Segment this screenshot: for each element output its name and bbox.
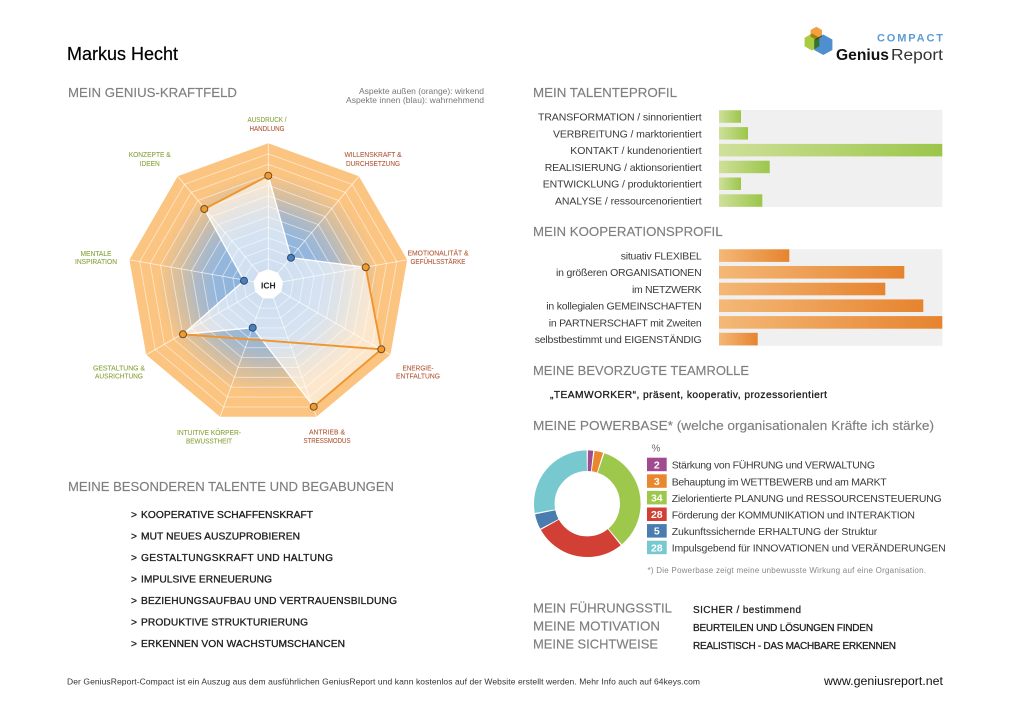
chart: talenteprofil: ANALYSE / ressourcenorientiert <box>555 196 702 208</box>
chart: kooperationsprofil: in kollegialen GEMEINSCHAFTEN <box>546 301 702 313</box>
label: antrieb: ANTRIEB & <box>309 430 345 436</box>
website: www.geniusreport.net <box>823 676 944 688</box>
talent list: PRODUKTIVE STRUKTURIERUNG <box>141 618 308 628</box>
center ICH <box>254 269 283 298</box>
chart: kooperationsprofil: situativ FLEXIBEL <box>621 250 702 262</box>
powerbase legend: % <box>652 444 660 454</box>
talent list: MUT NEUES AUSZUPROBIEREN <box>141 532 300 542</box>
legend row 1: 2 <box>654 459 660 471</box>
team role text: „TEAMWORKER“, präsent, kooperativ, prozessorientiert <box>550 390 827 401</box>
talent list: > <box>131 574 137 586</box>
heading: talente: MEINE BESONDEREN TALENTE UND BEGABUNGEN <box>68 480 394 494</box>
fuehrungsstil row: MEIN FÜHRUNGSSTIL <box>533 602 672 616</box>
label: konzepte: IDEEN <box>140 161 160 168</box>
chart: talenteprofil: REALISIERUNG / aktionsorientiert <box>545 162 702 174</box>
sichtweise row: REALISTISCH - DAS MACHBARE ERKENNEN <box>693 641 896 652</box>
label: willenskraft: DURCHSETZUNG <box>346 161 400 168</box>
motivation row: BEURTEILEN UND LÖSUNGEN FINDEN <box>693 622 873 634</box>
radar background <box>129 143 407 417</box>
label: willenskraft: WILLENSKRAFT & <box>344 152 402 159</box>
heading: teamrolle: MEINE BEVORZUGTE TEAMROLLE <box>533 364 749 378</box>
radar legend note <box>346 86 484 105</box>
powerbase footnote: *) Die Powerbase zeigt meine unbewusste Wirkung auf eine Organisation. <box>648 566 926 575</box>
talent list: KOOPERATIVE SCHAFFENSKRAFT <box>141 510 313 521</box>
label: emotionalitaet: GEFÜHLSSTÄRKE <box>410 258 466 266</box>
label: ausdruck <box>248 117 287 133</box>
chart: kooperationsprofil <box>535 249 942 346</box>
logo text: report: Report <box>891 47 944 64</box>
label: ausdruck: AUSDRUCK / <box>248 117 287 124</box>
label: ausdruck: HANDLUNG <box>250 126 284 133</box>
chart: kooperationsprofil: selbstbestimmt und EIGENSTÄNDIG <box>535 334 702 346</box>
logo text: compact: COMPACT <box>877 32 943 44</box>
label: konzepte: KONZEPTE & <box>129 152 171 159</box>
talent list: ERKENNEN VON WACHSTUMSCHANCEN <box>141 639 345 650</box>
legend row 1: Stärkung von FÜHRUNG und VERWALTUNG <box>672 460 875 472</box>
label: energie: ENTFALTUNG <box>396 374 440 380</box>
logo <box>805 27 944 64</box>
label: emotionalitaet <box>408 250 469 266</box>
title: Markus Hecht <box>67 43 178 64</box>
chart: talenteprofil: KONTAKT / kundenorientiert <box>570 145 702 157</box>
legend row 6: Impulsgebend für INNOVATIONEN und VERÄNDERUNGEN <box>672 543 946 555</box>
legend row 5: 5 <box>654 526 660 538</box>
talent list: GESTALTUNGSKRAFT UND HALTUNG <box>141 553 333 564</box>
talent list: > <box>131 532 137 542</box>
chart: kooperationsprofil: im NETZWERK <box>632 284 702 296</box>
center ICH: ICH <box>261 280 276 290</box>
radar labels <box>75 117 469 446</box>
label: energie <box>396 366 440 380</box>
motivation row <box>533 620 873 634</box>
legend row 5: Zukunftssichernde ERHALTUNG der Struktur <box>672 526 878 538</box>
motivation row: MEINE MOTIVATION <box>533 620 660 634</box>
heading: kooperationsprofil: MEIN KOOPERATIONSPROFIL <box>533 225 723 239</box>
talent list: BEZIEHUNGSAUFBAU UND VERTRAUENSBILDUNG <box>141 596 397 607</box>
fuehrungsstil row <box>533 602 801 616</box>
legend row 3: 34 <box>651 492 663 504</box>
label: willenskraft <box>344 152 402 168</box>
legend row 4: 28 <box>651 509 663 521</box>
label: intuitive: BEWUSSTHEIT <box>186 438 233 446</box>
heading: powerbase: MEINE POWERBASE* (welche organisationalen Kräfte ich stärke) <box>533 419 934 433</box>
orange data lines <box>183 176 381 407</box>
chart: kooperationsprofil: in größeren ORGANISATIONEN <box>556 267 702 279</box>
orange markers <box>179 172 385 410</box>
label: emotionalitaet: EMOTIONALITÄT & <box>408 250 469 258</box>
heading: genius-kraftfeld: MEIN GENIUS-KRAFTFELD <box>68 86 237 100</box>
chart: talenteprofil <box>538 110 942 208</box>
talent list: > <box>131 553 137 564</box>
legend row 2: Behauptung im WETTBEWERB und am MARKT <box>672 476 887 488</box>
label: konzepte <box>129 152 171 168</box>
label: gestaltung: GESTALTUNG & <box>93 366 145 372</box>
chart: talenteprofil: ENTWICKLUNG / produktorientiert <box>543 179 702 191</box>
label: mentale: INSPIRATION <box>75 259 117 266</box>
label: energie: ENERGIE- <box>402 366 434 372</box>
talent list: > <box>131 639 137 650</box>
label: intuitive: INTUITIVE KÖRPER- <box>177 429 242 437</box>
talent list: IMPULSIVE ERNEUERUNG <box>141 574 272 586</box>
talent list <box>131 510 397 650</box>
label: gestaltung <box>93 366 145 380</box>
data area <box>183 176 381 407</box>
footer note: Der GeniusReport-Compact ist ein Auszug aus dem ausführlichen GeniusReport und kann kostenlos auf der Website erstellt werden. Mehr Info auch auf 64keys.com <box>67 676 700 686</box>
radar legend note: Aspekte außen (orange): wirkend <box>359 86 484 96</box>
heading: talenteprofil: MEIN TALENTEPROFIL <box>533 86 677 100</box>
label: gestaltung: AUSRICHTUNG <box>95 374 143 380</box>
legend row 3: Zielorientierte PLANUNG und RESSOURCENSTEUERUNG <box>672 493 942 505</box>
label: antrieb: STRESSMODUS <box>304 438 351 445</box>
label: mentale <box>75 251 117 266</box>
sichtweise row <box>533 638 896 652</box>
label: mentale: MENTALE <box>80 251 112 258</box>
label: antrieb <box>304 430 351 445</box>
label: intuitive <box>177 429 242 446</box>
talent list: > <box>131 510 137 521</box>
chart: talenteprofil: TRANSFORMATION / sinnorientiert <box>538 112 702 124</box>
donut chart <box>544 461 630 547</box>
legend row 6: 28 <box>651 542 663 554</box>
fuehrungsstil row: SICHER / bestimmend <box>693 605 801 616</box>
logo text: genius: Genius <box>836 47 889 64</box>
radar chart <box>129 143 407 417</box>
sichtweise row: MEINE SICHTWEISE <box>533 638 658 652</box>
powerbase legend <box>647 444 946 555</box>
talent list: > <box>131 596 137 607</box>
chart: talenteprofil: VERBREITUNG / marktorientiert <box>553 128 702 140</box>
legend row 4: Förderung der KOMMUNIKATION und INTERAKTION <box>672 510 915 522</box>
radar legend note: Aspekte innen (blau): wahrnehmend <box>346 95 484 105</box>
chart: kooperationsprofil: in PARTNERSCHAFT mit Zweiten <box>549 317 702 329</box>
legend row 2: 3 <box>654 476 660 488</box>
blue markers <box>240 254 294 331</box>
icon: logo hexagons <box>805 27 832 55</box>
talent list: > <box>131 618 137 628</box>
